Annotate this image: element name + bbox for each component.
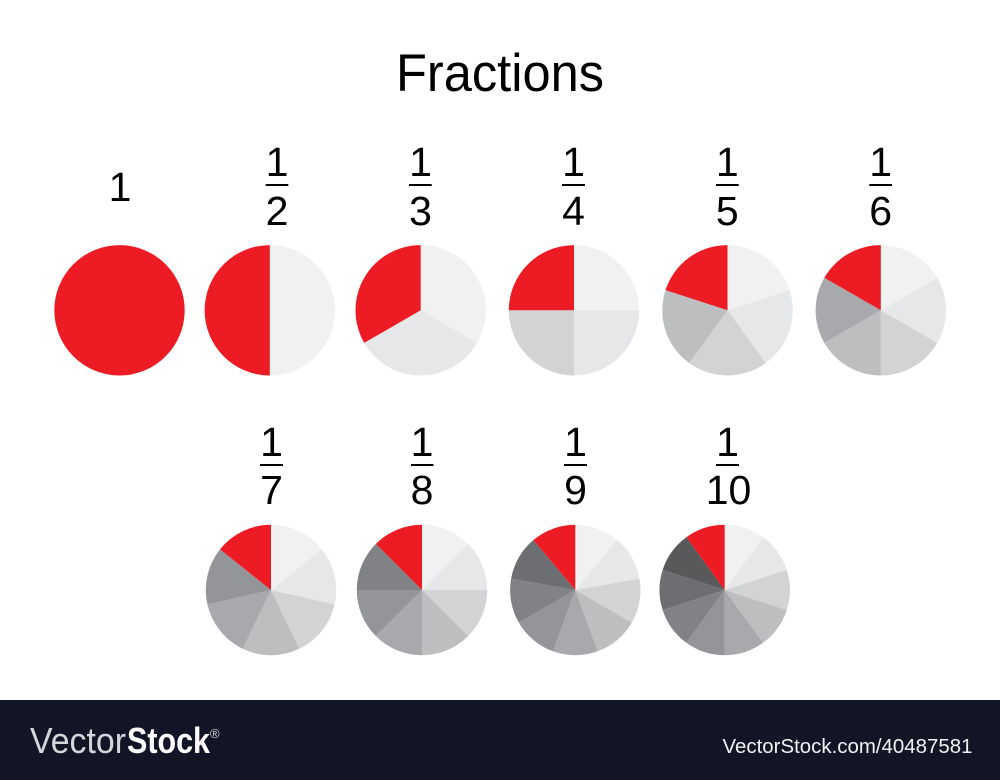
- footer logo: Vector: [30, 720, 126, 761]
- fraction label: 1/5: 1: [716, 139, 739, 185]
- pie: one fifth: [662, 245, 793, 375]
- fraction label: 1/3: [409, 139, 432, 234]
- footer logo: [30, 720, 220, 761]
- pie: one sixth: [816, 245, 946, 376]
- fraction label: 1/4: 4: [562, 188, 585, 234]
- fraction label: 1/8: 8: [411, 467, 433, 513]
- fraction label: 1/6: [869, 139, 892, 234]
- fraction label: 1/9: 9: [564, 467, 587, 513]
- fraction label: 1/5: 5: [716, 188, 739, 234]
- title: Fractions: [396, 44, 604, 103]
- fraction label: 1/9: [564, 419, 587, 513]
- fraction label: 1/10: [706, 419, 751, 513]
- fraction label: 1/8: 1: [411, 419, 433, 465]
- footer bar: [0, 700, 1000, 780]
- fraction label: 1/7: 1: [260, 419, 283, 465]
- fraction label: 1/6: 6: [869, 188, 892, 234]
- fraction label: 1/2: 2: [266, 188, 288, 234]
- label: 1: 1: [109, 164, 131, 210]
- fraction label: 1/5: [716, 139, 739, 234]
- fraction label: 1/4: [562, 139, 585, 234]
- pie: one seventh: [206, 525, 336, 655]
- fraction label: 1/8: [411, 419, 434, 513]
- fraction label: 1/6: 1: [869, 139, 892, 185]
- fraction label: 1/10: 1: [716, 419, 739, 465]
- pie: one tenth: [659, 525, 790, 655]
- pie: one half: [205, 245, 335, 376]
- footer logo: Stock: [127, 720, 211, 761]
- fraction label: 1/2: [266, 139, 288, 234]
- footer logo: ®: [210, 726, 220, 741]
- pie: one ninth: [510, 525, 640, 655]
- pie: one third: [356, 245, 486, 375]
- fraction label: 1/9: 1: [564, 419, 587, 465]
- pie: one quarter: [509, 245, 639, 376]
- fraction label: 1/3: 3: [409, 188, 432, 234]
- fraction label: 1/2: 1: [266, 139, 288, 185]
- fraction label: 1/4: 1: [562, 139, 585, 185]
- fraction label: 1/7: [260, 419, 283, 513]
- pie: whole: [54, 245, 185, 376]
- footer image id: VectorStock.com/40487581: [722, 736, 972, 758]
- pie: one eighth: [357, 525, 487, 655]
- fraction label: 1/3: 1: [409, 139, 432, 185]
- fraction label: 1/7: 7: [260, 467, 283, 513]
- fraction label: 1/10: 10: [706, 467, 751, 513]
